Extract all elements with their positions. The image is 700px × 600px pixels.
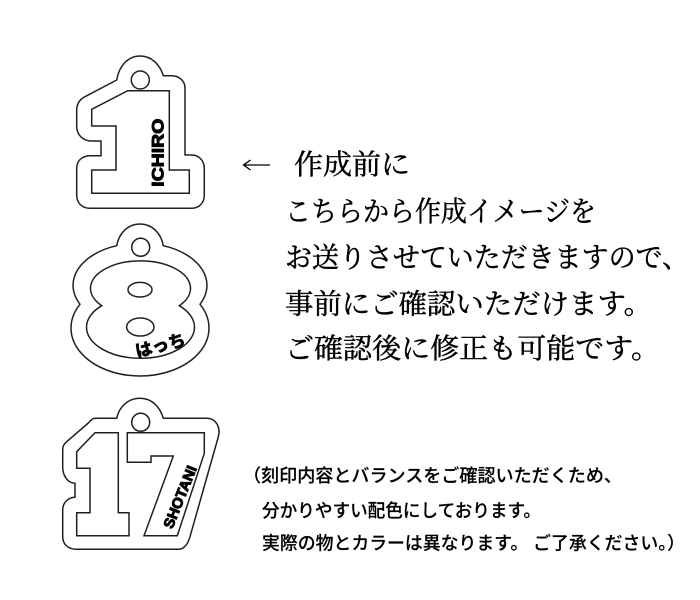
keychain tag: number 1 ICHIRO: ICHIRO [148, 119, 168, 187]
main message text: 事前にご確認いただけます。 [285, 288, 652, 320]
note about colours: 実際の物とカラーは異なります。 ご了承ください。） [262, 534, 685, 554]
keychain tag: number 8 はっち [71, 224, 209, 376]
keychain tag: number 8 はっち: はっち [133, 331, 187, 361]
arrow pointing to tag [244, 160, 270, 170]
note about colours: （刻印内容とバランスをご確認いただくため、 [243, 466, 622, 486]
main message text: お送りさせていただきますので、 [285, 242, 689, 274]
main message text: 作成前に [294, 149, 410, 181]
keychain tag: number 17 SHOTANI [63, 398, 219, 549]
note about colours [243, 466, 685, 554]
keychain tag: number 17 SHOTANI: SHOTANI [161, 464, 201, 531]
main message text: こちらから作成イメージを [285, 196, 596, 228]
main message text [285, 149, 689, 365]
keychain tag: number 1 ICHIRO [77, 56, 204, 208]
main message text: ご確認後に修正も可能です。 [285, 333, 660, 365]
note about colours: 分かりやすい配色にしております。 [262, 501, 541, 521]
